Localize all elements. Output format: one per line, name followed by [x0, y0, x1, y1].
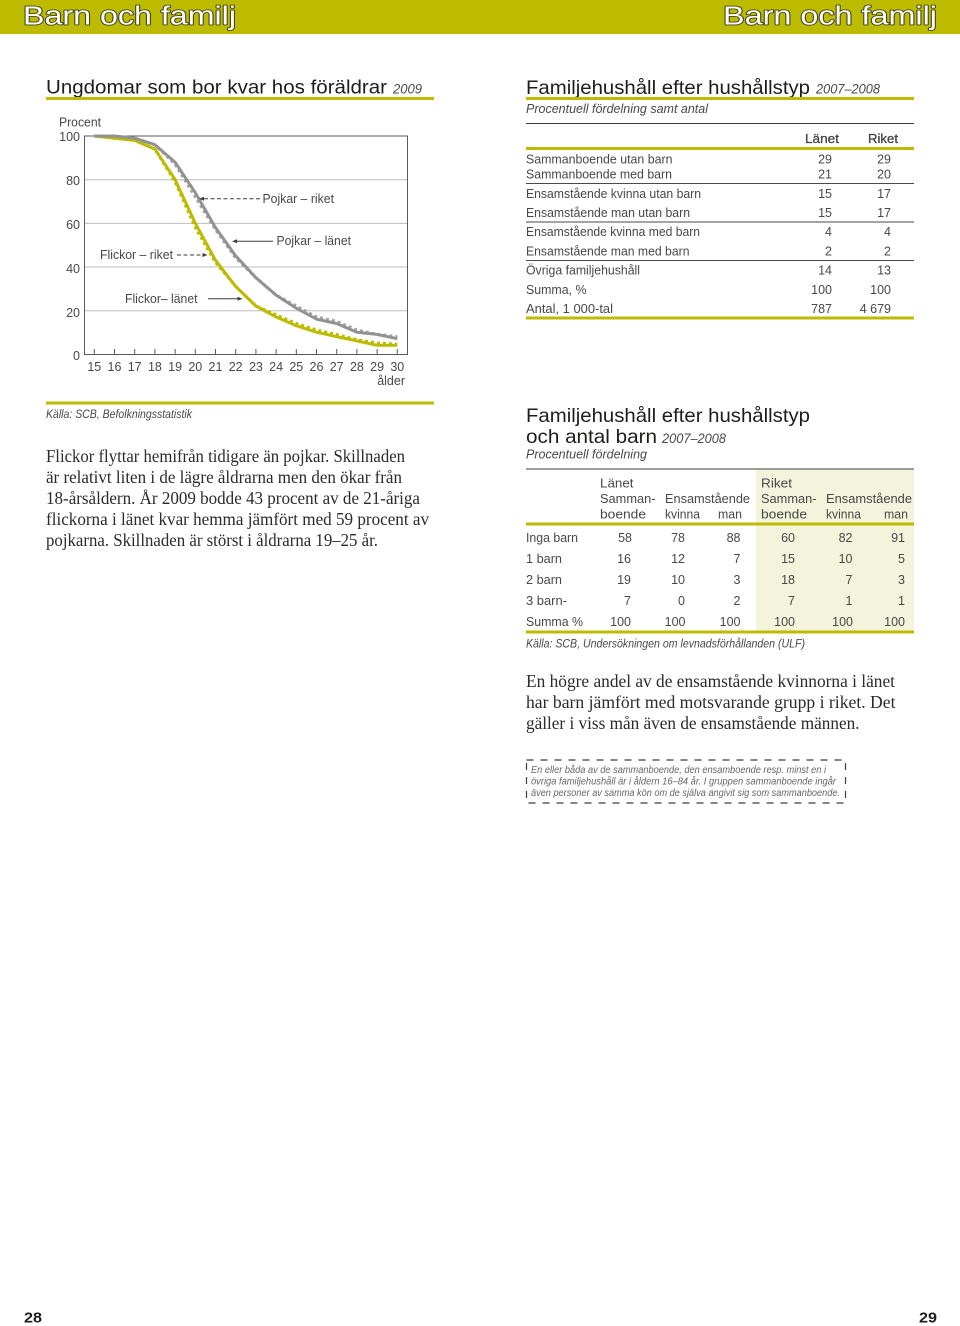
heading: Familjehushåll efter hushållstyp och antal barn: Procentuell fördelning — [526, 448, 647, 462]
row: Summa %: 100 — [832, 615, 853, 629]
heading: Familjehushåll efter hushållstyp och antal barn: Familjehushåll efter hushållstyp — [526, 405, 810, 427]
heading: Familjehushåll efter hushållstyp: 2007–2008 — [815, 82, 880, 96]
column: Riket values: 2 — [884, 244, 891, 258]
row: 2 barn: 7 — [846, 573, 853, 587]
x axis labels: 27 — [330, 360, 344, 374]
heading: Familjehushåll efter hushållstyp: Procentuell fördelning samt antal — [526, 102, 709, 116]
row: 1 barn: 10 — [839, 552, 853, 566]
heading: Ungdomar som bor kvar hos föräldrar: 2009 — [392, 82, 422, 96]
row: Summa %: 100 — [610, 615, 631, 629]
body text: left column: Flickor flyttar hemifrån tidigare än pojkar. Skillnaden — [46, 446, 405, 466]
header title right: Barn och familj — [723, 2, 937, 30]
source note: table: Källa: SCB, Undersökningen om levnadsförhållanden (ULF) — [526, 638, 805, 650]
x axis labels: 21 — [209, 360, 222, 374]
body text: right column: En högre andel av de ensamstående kvinnorna i länet — [526, 671, 895, 691]
row labels: Antal, 1 000-tal — [526, 302, 613, 316]
series: Pojkar riket — [94, 136, 397, 337]
header band — [0, 0, 960, 34]
series: Flickor riket — [94, 136, 397, 344]
y axis labels — [59, 130, 80, 363]
column: Länet values: 15 — [818, 206, 832, 220]
table: households by number of children — [526, 468, 914, 634]
y axis labels: 100 — [59, 130, 80, 144]
page number right: 29 — [919, 1310, 937, 1326]
row labels: Ensamstående man utan barn — [526, 206, 690, 220]
column: Riket values: 17 — [877, 187, 891, 201]
y axis labels: 60 — [66, 218, 80, 232]
column: Länet values: 29 — [818, 152, 832, 166]
row: 2 barn: 3 — [734, 573, 741, 587]
callout: Flickor länet — [125, 292, 242, 306]
row: Inga barn: 60 — [781, 531, 795, 545]
row: Inga barn: 88 — [727, 531, 741, 545]
table: household types: Länet — [805, 132, 840, 146]
column headers: Riket: boende — [761, 508, 807, 522]
row: 3 barn-: 1 — [846, 594, 853, 608]
column headers: Länet: Samman- — [600, 492, 656, 506]
row: 3 barn- — [526, 594, 905, 608]
heading: Familjehushåll efter hushållstyp — [526, 77, 914, 116]
source rule and note: chart: Källa: SCB, Befolkningsstatistik — [46, 409, 193, 421]
line chart: share living with parents by age — [59, 116, 408, 388]
row labels: Ensamstående kvinna utan barn — [526, 187, 701, 201]
row: 2 barn: 3 — [898, 573, 905, 587]
column: Riket values: 17 — [877, 206, 891, 220]
x axis labels: 20 — [188, 360, 202, 374]
column headers: Riket: Riket — [761, 476, 793, 490]
row labels: Ensamstående kvinna med barn — [526, 225, 700, 239]
column: Riket values: 29 — [877, 152, 891, 166]
x axis labels: 19 — [168, 360, 182, 374]
row: 1 barn: 15 — [781, 552, 795, 566]
column: Länet values: 787 — [811, 302, 832, 316]
x axis labels: 30 — [390, 360, 404, 374]
column headers: Länet — [600, 476, 750, 522]
y axis labels: 0 — [73, 349, 80, 363]
column headers: Länet: man — [718, 508, 742, 522]
column: Länet values — [811, 152, 832, 316]
body text: left column: 18-årsåldern. År 2009 bodde 43 procent av de 21-åriga — [46, 488, 420, 508]
row: Summa % — [526, 615, 905, 629]
column headers: Riket: kvinna — [826, 508, 861, 522]
column headers: Länet: kvinna — [665, 508, 700, 522]
column headers: Riket — [761, 476, 912, 522]
column: Länet values: 100 — [811, 283, 832, 297]
row: 2 barn: 18 — [781, 573, 795, 587]
row: Summa %: Summa % — [526, 615, 583, 629]
heading: Familjehushåll efter hushållstyp och antal barn: och antal barn — [526, 426, 657, 448]
header title left: Barn och familj — [23, 2, 236, 30]
row: 1 barn: 1 barn — [526, 552, 562, 566]
row: 1 barn: 7 — [734, 552, 741, 566]
column headers: Länet: Länet — [600, 476, 634, 490]
table: household types — [526, 123, 914, 320]
y axis labels: 20 — [66, 306, 80, 320]
column headers: Riket: Ensamstående — [826, 492, 912, 506]
row: 2 barn — [526, 573, 905, 587]
x axis labels: 15 — [87, 360, 101, 374]
callout: Flickor riket: Flickor – riket — [100, 248, 174, 262]
callout: Pojkar länet: Pojkar – länet — [276, 234, 352, 248]
row: Inga barn: Inga barn — [526, 531, 578, 545]
series: Flickor länet — [94, 136, 397, 345]
row: 2 barn: 19 — [617, 573, 631, 587]
row: 2 barn: 2 barn — [526, 573, 562, 587]
body text: right column: har barn jämfört med motsvarande grupp i riket. Det — [526, 692, 896, 712]
heading: Familjehushåll efter hushållstyp och antal barn — [526, 405, 810, 462]
column: Riket values — [860, 152, 891, 316]
row: Summa %: 100 — [774, 615, 795, 629]
heading: Familjehushåll efter hushållstyp och antal barn: 2007–2008 — [661, 431, 726, 446]
footnote box: även personer av samma kön om de själva angivit sig som sammanboende. — [531, 788, 840, 799]
row: Summa %: 100 — [884, 615, 905, 629]
row labels: Ensamstående man med barn — [526, 244, 690, 258]
row: 3 barn-: 7 — [624, 594, 631, 608]
series: Pojkar länet — [94, 136, 397, 339]
row: Inga barn: 82 — [839, 531, 853, 545]
callout: Pojkar riket — [199, 192, 335, 206]
body text: left column: är relativt liten i de lägre åldrarna men den ökar från — [46, 467, 402, 487]
callout: Pojkar riket: Pojkar – riket — [262, 192, 335, 206]
row: Inga barn: 58 — [618, 531, 632, 545]
row: 3 barn-: 3 barn- — [526, 594, 567, 608]
row: 1 barn: 12 — [671, 552, 685, 566]
y axis labels: 40 — [66, 262, 80, 276]
y axis title: Procent — [59, 116, 101, 130]
y axis labels: 80 — [66, 174, 80, 188]
footnote box: En eller båda av de sammanboende, den ensamboende resp. minst en i — [531, 764, 827, 776]
row: 3 barn-: 0 — [678, 594, 685, 608]
body text: left column: flickorna i länet kvar hemma jämfört med 59 procent av — [46, 509, 429, 529]
row: 1 barn — [526, 552, 905, 566]
callout: Flickor länet: Flickor– länet — [125, 292, 198, 306]
x axis labels: 28 — [350, 360, 364, 374]
column: Riket values: 4 679 — [860, 302, 891, 316]
callout: Pojkar länet — [232, 234, 352, 248]
column headers: Riket: Samman- — [761, 492, 816, 506]
heading: Ungdomar som bor kvar hos föräldrar: Ungdomar som bor kvar hos föräldrar — [46, 76, 388, 98]
x axis labels: 17 — [128, 360, 142, 374]
x axis labels: 25 — [289, 360, 303, 374]
row: 1 barn: 5 — [898, 552, 905, 566]
footnote box: övriga familjehushåll är i åldern 16–84 år. I gruppen sammanboende ingår — [531, 776, 837, 788]
column headers: Länet: boende — [600, 508, 646, 522]
source rule and note: chart — [46, 402, 434, 421]
body text: left column — [46, 446, 429, 550]
footnote box — [526, 760, 846, 803]
x axis labels: 24 — [269, 360, 283, 374]
column: Länet values: 2 — [825, 244, 832, 258]
row: 3 barn-: 1 — [898, 594, 905, 608]
row: Inga barn — [526, 531, 905, 545]
x axis labels: 22 — [229, 360, 243, 374]
x axis labels: 26 — [310, 360, 323, 374]
x axis labels: ålder — [377, 374, 405, 388]
column: Länet values: 4 — [825, 225, 832, 239]
row: 2 barn: 10 — [671, 573, 685, 587]
x axis labels: 18 — [148, 360, 162, 374]
column: Länet values: 14 — [818, 264, 832, 278]
table: household types: Riket — [868, 132, 899, 146]
callout: Flickor riket — [100, 248, 208, 262]
page number left: 28 — [24, 1310, 42, 1326]
column headers: Riket: man — [884, 508, 908, 522]
column: Riket values: 13 — [877, 264, 891, 278]
row labels: Sammanboende med barn — [526, 168, 672, 182]
x axis labels: 23 — [249, 360, 263, 374]
row labels: Övriga familjehushåll — [526, 264, 640, 278]
row labels: Summa, % — [526, 283, 586, 297]
row: 3 barn-: 7 — [788, 594, 795, 608]
row: 1 barn: 16 — [617, 552, 631, 566]
x axis labels: 16 — [108, 360, 121, 374]
row: 3 barn-: 2 — [734, 594, 741, 608]
body text: left column: pojkarna. Skillnaden är störst i åldrarna 19–25 år. — [46, 530, 378, 550]
x axis labels — [87, 360, 405, 388]
body text: right column — [526, 671, 896, 733]
column: Riket values: 4 — [884, 225, 891, 239]
heading: Familjehushåll efter hushållstyp: Familjehushåll efter hushållstyp — [526, 77, 810, 99]
row: Summa %: 100 — [720, 615, 741, 629]
row: Inga barn: 91 — [891, 531, 905, 545]
row labels — [526, 152, 701, 316]
column: Riket values: 100 — [870, 283, 891, 297]
x axis labels: 29 — [370, 360, 384, 374]
body text: right column: gäller i viss mån även de ensamstående männen. — [526, 713, 860, 733]
column: Länet values: 15 — [818, 187, 832, 201]
row: Inga barn: 78 — [671, 531, 685, 545]
row labels: Sammanboende utan barn — [526, 152, 673, 166]
column headers: Länet: Ensamstående — [665, 492, 750, 506]
column: Riket values: 20 — [877, 168, 891, 182]
row: Summa %: 100 — [665, 615, 686, 629]
column: Länet values: 21 — [818, 168, 832, 182]
